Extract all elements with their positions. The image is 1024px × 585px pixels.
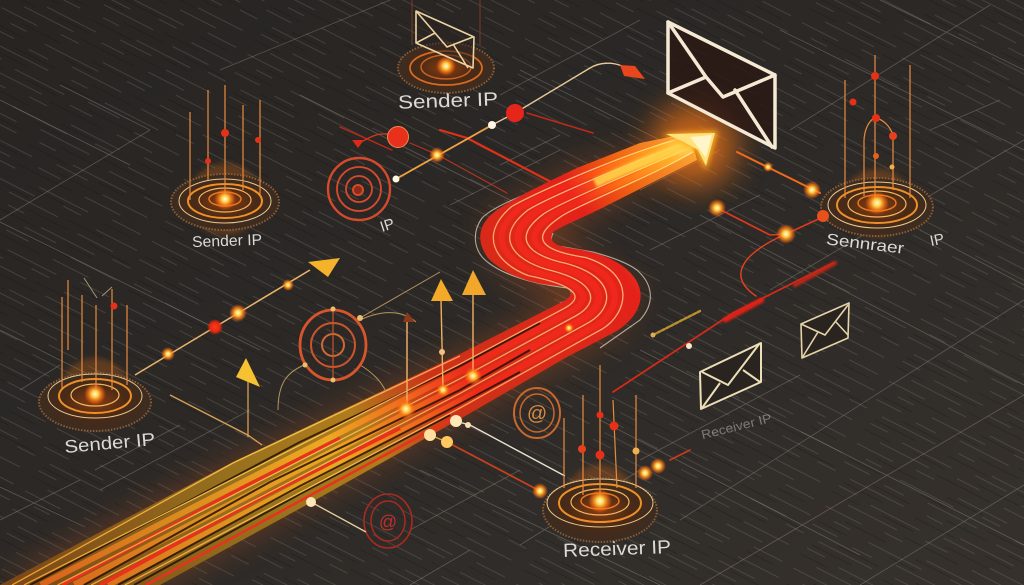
main S-curve ribbon — [0, 133, 697, 585]
target: concentric rings centre-left — [278, 272, 440, 410]
ribbon wide strands — [41, 139, 692, 585]
label: garbled Sender: Sennraer — [825, 231, 906, 258]
upper ribbon yellow core — [595, 144, 692, 183]
red and yellow signal traces behind ribbon — [340, 113, 835, 460]
connector lines from ribbon — [306, 415, 666, 532]
node: Sender IP top with envelope — [398, 0, 494, 93]
faint garbled Receiver label: Receiver IP — [700, 411, 773, 442]
red strands lower-left — [62, 420, 450, 585]
ribbon outer outline — [475, 190, 650, 348]
envelope: medium — [700, 343, 761, 409]
faint envelope outline — [84, 278, 112, 298]
signal line to yellow arrow — [135, 258, 340, 375]
node: Receiver IP — [543, 365, 657, 542]
node: right with signal posts — [821, 55, 933, 237]
arrowhead of main ribbon — [662, 131, 718, 170]
yellow arrow head — [308, 258, 340, 277]
label: Sender IP: Sender IP — [398, 89, 498, 114]
red arrow head — [620, 65, 645, 79]
up arrows rising from ribbon — [396, 270, 574, 419]
label: Receiver IP: Receiver IP — [563, 537, 671, 562]
ribbon glow dots — [396, 399, 416, 419]
symbol: @ red target — [364, 494, 412, 548]
node: Sender IP left-centre — [171, 85, 279, 235]
signal dots — [392, 176, 400, 182]
label: Sender IP: Sender IP — [192, 232, 262, 251]
ribbon body — [0, 133, 697, 585]
symbol: @ red target: @ — [379, 512, 397, 532]
label: Sender IP: Sender IP — [64, 429, 156, 457]
upper signal line with arrow — [392, 63, 645, 182]
envelope: small — [801, 303, 849, 358]
up arrow: left — [170, 358, 262, 445]
symbol: @ orange: @ — [527, 403, 547, 425]
right-side signal dots — [650, 162, 829, 349]
ribbon dark gaps — [30, 323, 540, 585]
node: Sender IP lower-left — [39, 278, 151, 431]
small red connector and dots — [352, 126, 408, 148]
label: IP: IP — [378, 215, 397, 236]
arrowhead ambient glow — [653, 103, 737, 187]
target: IP — [328, 158, 390, 220]
envelope: large main — [668, 22, 775, 148]
symbol: @ orange — [514, 388, 560, 438]
envelope on top node — [416, 11, 474, 68]
label: IP right: IP — [928, 230, 946, 250]
ribbon ambient glow — [0, 135, 695, 585]
ribbon highlight filaments — [12, 136, 693, 585]
